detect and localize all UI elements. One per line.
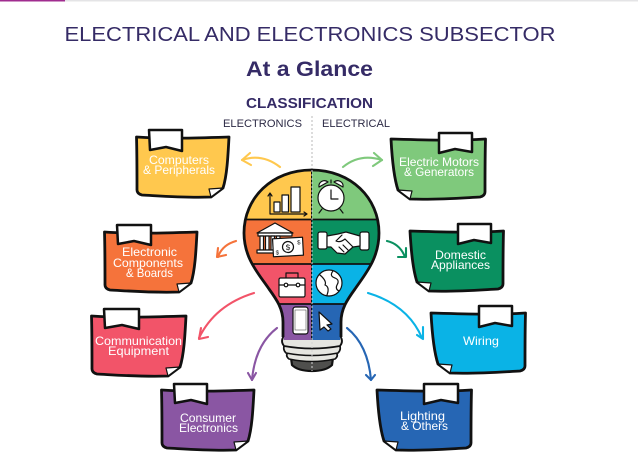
icon: globe: [316, 270, 342, 296]
icon: banknotes: $: [276, 250, 280, 257]
panel: electronic components and boards: Electronic: [122, 246, 177, 259]
panel: electric motors and generators: & Generators: [404, 166, 474, 179]
label: electrical: ELECTRICAL: [322, 118, 390, 130]
bulb colour segments: [245, 171, 378, 340]
panel: lighting and others: Lighting: [400, 410, 445, 423]
panel: communication equipment: Communication: [95, 335, 182, 348]
icon: bar chart: [268, 187, 307, 216]
panel: consumer electronics: [162, 384, 254, 450]
icon: briefcase: [279, 273, 305, 297]
icon: mouse cursor: [319, 312, 332, 331]
panel: electric motors and generators: Electric Motors: [399, 156, 479, 169]
panel: electronic components and boards: [104, 225, 197, 292]
panel: computers and peripherals: [136, 130, 229, 197]
panel: consumer electronics: Electronics: [179, 422, 238, 435]
icon: bank building: [257, 223, 293, 253]
light bulb: [240, 165, 384, 371]
panel: computers and peripherals: & Peripherals: [143, 164, 215, 177]
bulb outline: [244, 170, 379, 337]
panel: electric motors and generators: [391, 133, 486, 199]
panel: communication equipment: [92, 309, 186, 376]
icon: smartphone: [293, 307, 308, 334]
label: electronics: ELECTRONICS: [223, 118, 302, 130]
bulb base screw: [282, 336, 342, 371]
icon: banknotes: $: [286, 243, 291, 252]
panel: domestic appliances: Domestic: [435, 249, 486, 262]
panel: wiring: Wiring: [463, 335, 499, 348]
panel: computers and peripherals: Computers: [149, 154, 209, 167]
icon: handshake: [318, 232, 369, 254]
arrow: domestic appliances: [387, 241, 406, 257]
panel: lighting and others: [377, 384, 472, 450]
panel: communication equipment: Equipment: [108, 345, 170, 358]
panel: electronic components and boards: Components: [113, 257, 183, 270]
title: ELECTRICAL AND ELECTRONICS SUBSECTOR: [64, 23, 556, 46]
panel: lighting and others: & Others: [401, 420, 448, 433]
arrow: consumer electronics: [248, 328, 277, 380]
panel: wiring: [431, 306, 526, 373]
panel: consumer electronics: Consumer: [180, 412, 236, 425]
arrow: communication equipment: [199, 293, 254, 339]
icon: alarm clock: [318, 180, 344, 213]
arrow: lighting: [347, 328, 375, 380]
panel: domestic appliances: Appliances: [431, 259, 490, 272]
panel: electronic components and boards: & Boards: [126, 267, 173, 280]
arrow: electronic components: [217, 241, 236, 257]
arrow: electric motors: [343, 153, 382, 167]
panel: domestic appliances: [410, 224, 504, 291]
icon: banknotes: [273, 237, 303, 257]
icon: banknotes: $: [297, 240, 301, 247]
heading: classification: CLASSIFICATION: [246, 96, 373, 112]
arrow: computers: [242, 153, 280, 167]
arrow: wiring: [368, 293, 423, 339]
subtitle: At a Glance: [246, 58, 373, 81]
